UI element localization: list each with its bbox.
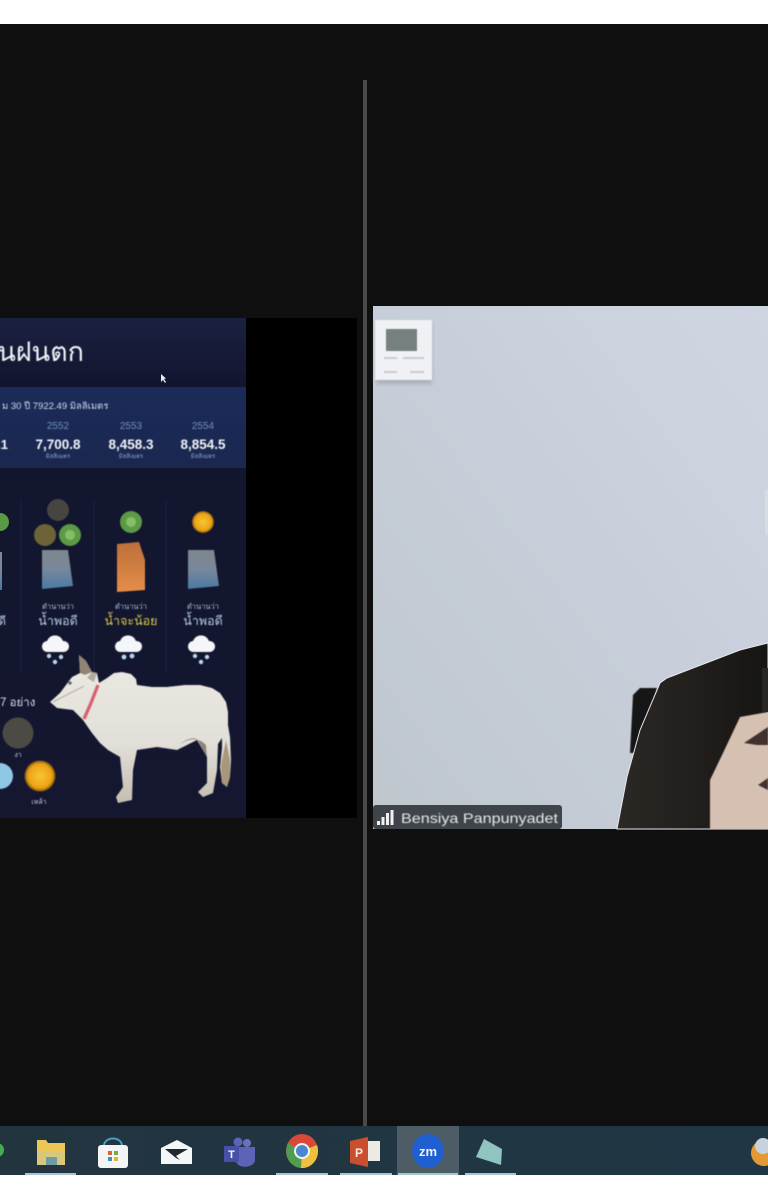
hair edge [765,490,768,535]
icon: teams: T [228,1149,235,1161]
icon: water [0,763,13,789]
year 2552 value: 2552 [47,421,70,432]
panel: participant video [373,306,768,829]
icon: file explorer [37,1140,65,1165]
center divider [363,80,367,1126]
column 3: crop icon and forecast [105,511,157,628]
icon: rain cloud 2552 [42,635,69,664]
hand shadow [744,727,768,790]
year 2554 value: 2554 [192,421,215,432]
icon: signal bars [377,810,394,825]
year 2552 value [35,421,81,460]
person hand [710,712,768,829]
person jacket [617,643,768,829]
top white strip [0,0,768,24]
icon: rain cloud 2553 [115,635,142,659]
icon: notes app [476,1139,502,1165]
chair back [630,688,657,753]
column 4: crop icon and forecast [183,511,223,628]
year 2552 value: มิลลิเมตร [46,453,71,460]
icon: sesame: งา [14,752,22,759]
bottom white strip [0,1175,768,1200]
year 2553 value: มิลลิเมตร [119,453,144,460]
black slide margin [246,318,357,818]
icon: tray app [751,1138,768,1166]
column 3: crop icon and forecast: น้ำจะน้อย [105,611,157,628]
icon: mail [161,1140,192,1164]
column 4: crop icon and forecast: น้ำพอดี [183,611,223,628]
icon: liquor: เหล้า [31,798,47,806]
icon: zoom: zm [419,1144,437,1159]
column 2: crop icons and forecast [34,499,81,628]
icon: teams [224,1138,255,1167]
year 2553 value: 8,458.3 [108,437,154,452]
cow [50,655,231,803]
year 2553 value [108,421,154,460]
column 1 partial [0,513,9,628]
year 2552 value: 7,700.8 [35,437,81,452]
icon: powerpoint [350,1137,380,1167]
column dividers [21,500,166,672]
column 2: crop icons and forecast: ตำนานว่า [42,602,74,611]
icon: green app [0,1143,4,1157]
foods heading: 7 อย่าง [0,697,35,709]
icon: sesame [2,718,34,759]
rainfall band [0,387,246,468]
column 3: crop icon and forecast: ตำนานว่า [115,602,147,611]
participant name tag: Bensiya Panpunyadet [401,810,558,826]
column 4: crop icon and forecast: ตำนานว่า [187,602,219,611]
active zoom tile [397,1126,459,1175]
icon: powerpoint: P [355,1146,363,1160]
year 2554 value [180,421,226,460]
year 2553 value: 2553 [120,421,143,432]
icon: chrome [286,1134,318,1168]
year 2554 value: มิลลิเมตร [191,453,216,460]
icon: wall thermostat [375,320,432,384]
column 2: crop icons and forecast: น้ำพอดี [38,611,78,628]
average rainfall text: ม 30 ปี 7922.49 มิลลิเมตร [2,400,108,412]
panel: shared slide [0,318,357,818]
microphone [762,668,768,712]
icon: zoom [412,1134,444,1168]
year 2554 value: 8,854.5 [180,437,226,452]
participant name tag [373,805,562,829]
cursor icon [161,374,166,383]
icon: rain cloud 2554 [188,635,215,664]
icon: liquor [24,760,56,806]
taskbar [0,1126,768,1175]
running indicators [25,1173,516,1175]
icon: microsoft store [98,1138,128,1168]
